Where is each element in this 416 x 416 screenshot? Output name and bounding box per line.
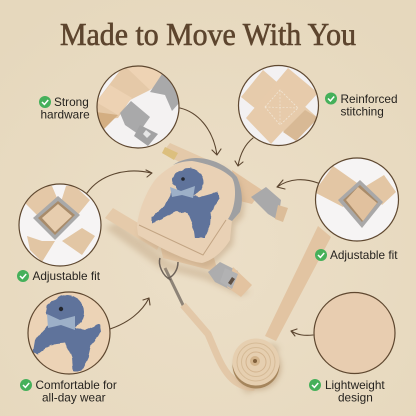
leash strap and roll <box>165 226 331 392</box>
label: strong hardware <box>39 95 90 122</box>
dog bow on backpack <box>170 186 195 198</box>
harness straps and buckles <box>105 143 288 297</box>
callout: strong hardware <box>96 64 180 148</box>
label: comfortable for all-day wear <box>20 378 117 404</box>
label: reinforced stitching <box>325 92 398 118</box>
callout: lightweight swatch <box>314 292 395 374</box>
label: lightweight design: Lightweight <box>325 378 385 392</box>
label: reinforced stitching: stitching <box>340 104 384 118</box>
title: Made to Move With You <box>60 16 356 52</box>
dog bow close-up <box>47 314 75 330</box>
eye close-up <box>59 307 63 311</box>
label: lightweight design <box>309 378 385 404</box>
label: lightweight design: design <box>338 390 373 404</box>
callout: reinforced stitching <box>238 66 318 146</box>
label: adjustable fit right: Adjustable fit <box>330 248 398 262</box>
arrows <box>87 108 318 336</box>
callout: adjustable fit right <box>314 158 398 241</box>
label: strong hardware: Strong <box>54 95 89 109</box>
label: strong hardware: hardware <box>40 108 90 122</box>
label: adjustable fit left: Adjustable fit <box>32 269 101 283</box>
callout: adjustable fit left <box>19 184 101 266</box>
label: comfortable for all-day wear: all-day wear <box>42 390 106 404</box>
label: reinforced stitching: Reinforced <box>340 92 398 106</box>
eye on backpack dog <box>181 177 185 181</box>
dog backpack <box>137 158 245 280</box>
dog patch <box>152 168 219 238</box>
callout: comfortable fabric dog <box>28 292 110 374</box>
dog close-up <box>33 295 101 371</box>
label: comfortable for all-day wear: Comfortable for <box>36 378 117 392</box>
